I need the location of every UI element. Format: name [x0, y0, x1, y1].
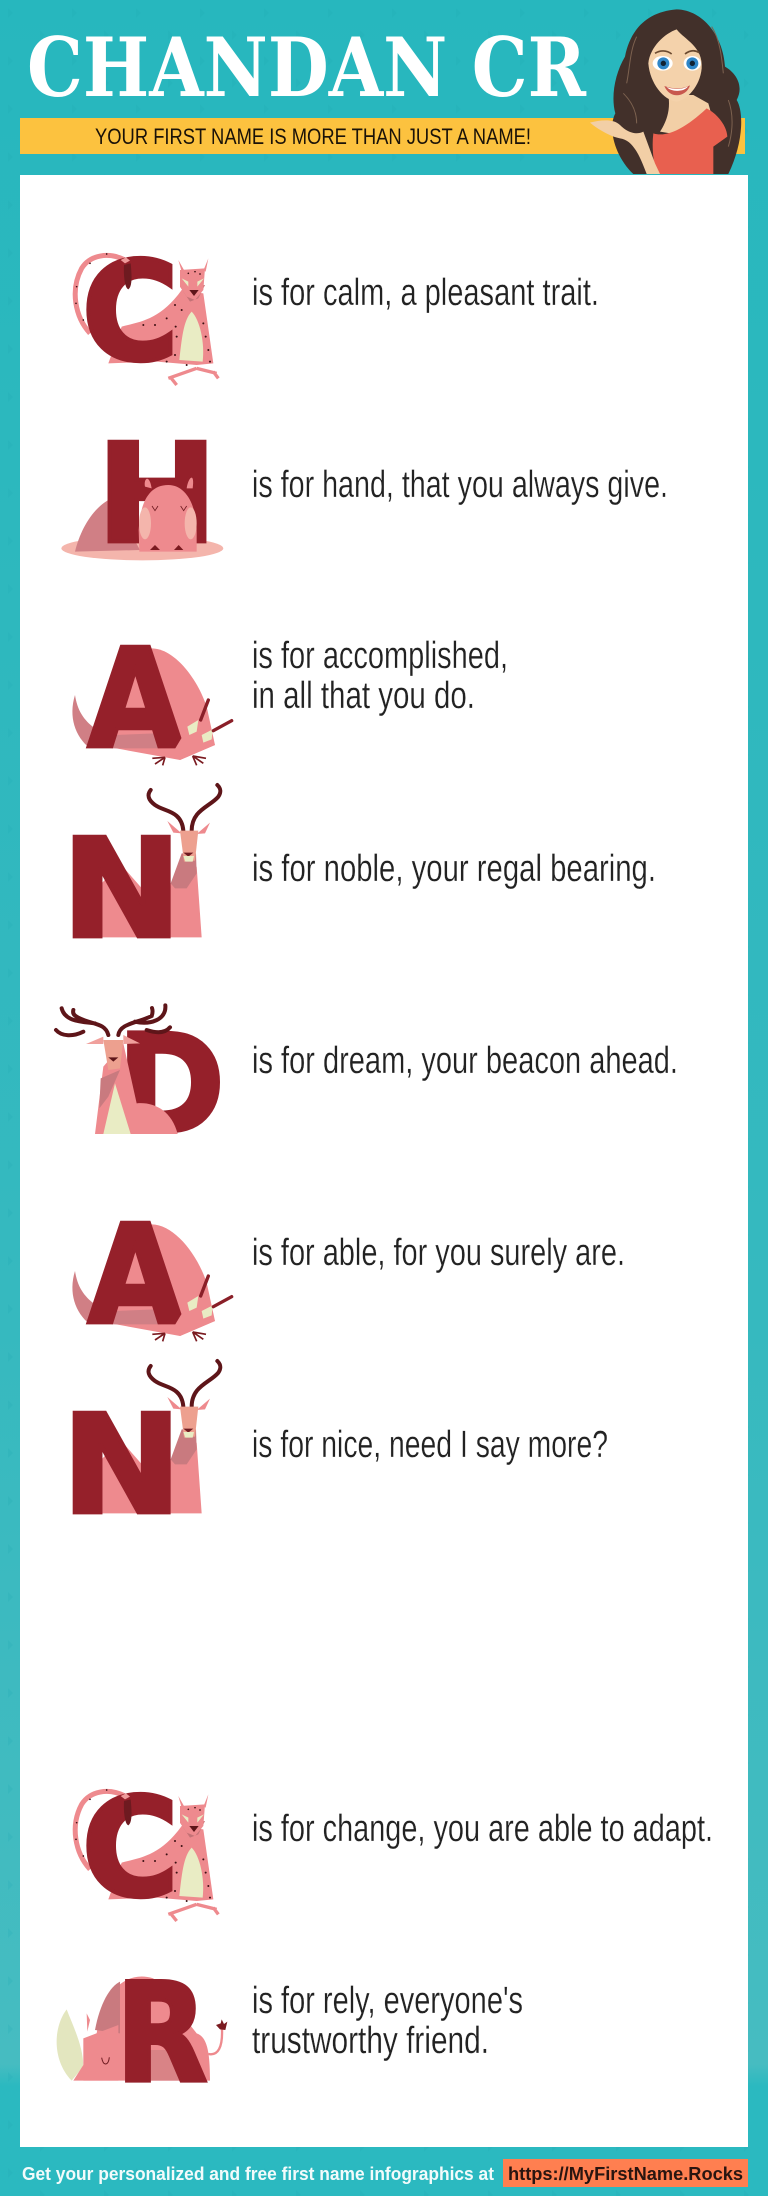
row: R for rely [57, 1955, 523, 2114]
icon: antelope letter N [62, 785, 220, 969]
row: H for hand [61, 415, 668, 574]
icon: leopard letter C: C [82, 232, 179, 392]
row: C for calm [75, 232, 599, 392]
icon: deer letter D: D [117, 1006, 225, 1165]
row: D for dream [56, 1005, 678, 1165]
icon: armadillo letter A [72, 1195, 232, 1355]
icon: cartoon woman [590, 9, 741, 174]
text: N line: is for noble, your regal bearing. [252, 848, 656, 890]
icon: rhino letter R [57, 1955, 227, 2114]
row: A for able [72, 1195, 625, 1355]
footer url badge [503, 2159, 748, 2187]
text: A lines: is for accomplished, [252, 635, 508, 677]
icon: hippo letter H: H [96, 415, 218, 574]
text: A lines: in all that you do. [252, 675, 475, 717]
text: A lines [252, 635, 508, 717]
banner [20, 118, 745, 154]
row: A for accomplished [72, 619, 508, 779]
text: R lines: is for rely, everyone's [252, 1980, 523, 2022]
text: R lines [252, 1980, 523, 2062]
icon: armadillo letter A: A [88, 619, 183, 779]
footer url badge: https://MyFirstName.Rocks [508, 2164, 743, 2184]
icon: armadillo letter A [72, 619, 232, 779]
icon: antelope letter N: N [62, 1387, 182, 1545]
footer text: Get your personalized and free first name infographics at [22, 2164, 494, 2184]
row: N for noble [62, 785, 656, 969]
icon: armadillo letter A: A [88, 1195, 183, 1355]
banner: YOUR FIRST NAME IS MORE THAN JUST A NAME! [95, 124, 531, 149]
text: C line: is for calm, a pleasant trait. [252, 272, 599, 314]
icon: leopard letter C [75, 232, 218, 392]
text: R lines: trustworthy friend. [252, 2020, 489, 2062]
row: N for nice [62, 1361, 608, 1545]
title: CHANDAN CR [27, 21, 587, 116]
row: C for change [75, 1768, 713, 1928]
text: N line: is for nice, need I say more? [252, 1424, 608, 1466]
icon: antelope letter N [62, 1361, 220, 1545]
icon: leopard letter C: C [82, 1768, 179, 1928]
icon: antelope letter N: N [62, 811, 182, 969]
icon: deer letter D [56, 1005, 225, 1165]
icon: leopard letter C [75, 1768, 218, 1928]
icon: rhino letter R: R [116, 1955, 207, 2114]
text: A line: is for able, for you surely are. [252, 1232, 625, 1274]
